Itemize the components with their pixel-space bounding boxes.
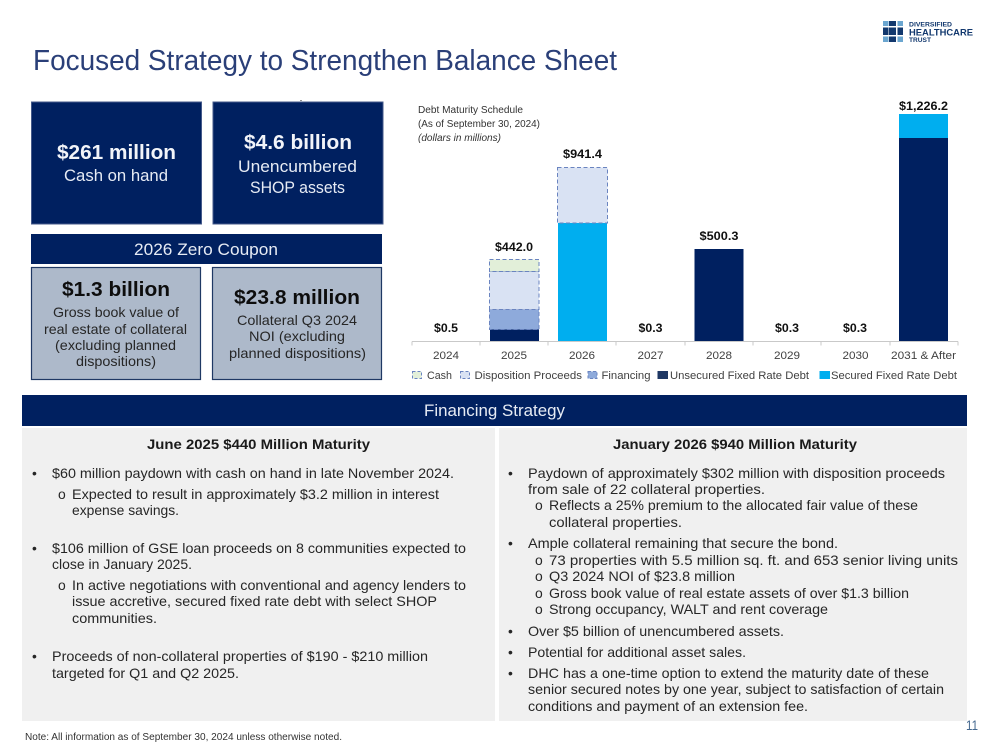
bullet list: • [508, 665, 513, 681]
legend: Cash [427, 370, 452, 382]
bullet list: o [58, 486, 66, 502]
panel: collateral NOI: Collateral Q3 2024 [237, 313, 357, 328]
bullet list [32, 465, 466, 681]
bullet list: expense savings. [72, 502, 179, 518]
bullet list: o [535, 601, 543, 617]
heading: Financing Strategy [22, 395, 967, 426]
panel: collateral NOI: $23.8 million [234, 286, 360, 309]
heading: Financing Strategy: Financing Strategy [424, 402, 566, 420]
bullet list: o [535, 585, 543, 601]
year labels [433, 350, 956, 362]
chart heading: (dollars in millions) [418, 133, 501, 144]
panel: unencumbered SHOP assets [213, 102, 383, 224]
bullet list: 73 properties with 5.5 million sq. ft. and 653 senior living units [549, 552, 958, 568]
year labels: 2029 [774, 350, 800, 362]
panel: unencumbered SHOP assets: Unencumbered [238, 158, 357, 176]
year labels: 2031 & After [891, 350, 956, 362]
value labels: $442.0 [495, 241, 533, 254]
bullet list: $60 million paydown with cash on hand in late November 2024. [52, 465, 454, 481]
page number: 11 [966, 718, 978, 733]
logo: Diversified Healthcare Trust: HEALTHCARE [909, 28, 973, 38]
panel: collateral NOI: planned dispositions) [229, 346, 366, 361]
bullet list: • [508, 535, 513, 551]
bullet list: o [535, 497, 543, 513]
column heading: June 2025 $440 Million Maturity [147, 437, 370, 452]
panel: June 2025 maturity [22, 428, 495, 721]
bullet list: senior secured notes by one year, subject to satisfaction of certain [528, 681, 944, 697]
panel: gross book value [32, 268, 200, 380]
legend: Unsecured Fixed Rate Debt [670, 370, 810, 382]
bullet list: $106 million of GSE loan proceeds on 8 communities expected to [52, 540, 466, 556]
value labels: $941.4 [563, 148, 603, 161]
panel: collateral NOI [212, 268, 382, 380]
panel: gross book value: real estate of collateral [44, 322, 187, 337]
value labels: $500.3 [700, 230, 739, 243]
value labels [434, 100, 948, 335]
bullet list: from sale of 22 collateral properties. [528, 481, 765, 497]
bullet list: • [508, 644, 513, 660]
year labels: 2024 [433, 350, 459, 362]
logo: Diversified Healthcare Trust: DIVERSIFIED [909, 22, 952, 28]
value labels: $0.5 [434, 322, 459, 335]
panel: collateral NOI: NOI (excluding [249, 329, 345, 344]
value labels: $0.3 [638, 322, 663, 335]
bullet list: targeted for Q1 and Q2 2025. [52, 665, 239, 681]
panel: cash on hand [32, 102, 202, 224]
bullet list: Gross book value of real estate assets of over $1.3 billion [549, 585, 909, 601]
year labels: 2030 [842, 350, 868, 362]
bullet list: In active negotiations with conventional and agency lenders to [72, 577, 466, 593]
panel: January 2026 maturity [499, 428, 967, 721]
value labels: $0.3 [775, 322, 800, 335]
legend: Financing [602, 370, 650, 382]
heading: 2026 Zero Coupon [31, 234, 382, 264]
chart heading: Debt Maturity Schedule [418, 105, 523, 116]
bar 2025 [490, 260, 539, 342]
bullet list: o [535, 552, 543, 568]
legend: Secured Fixed Rate Debt [831, 370, 958, 382]
logo: Diversified Healthcare Trust: TRUST [909, 37, 931, 44]
bullet list: • [32, 540, 37, 556]
chart heading [418, 105, 540, 144]
legend: Disposition Proceeds [474, 370, 582, 382]
bullet list: Proceeds of non-collateral properties of $190 - $210 million [52, 648, 428, 664]
bullet list: • [508, 465, 513, 481]
panel: gross book value: dispositions) [76, 354, 156, 369]
bullet list: issue accretive, secured fixed rate debt with select SHOP [72, 593, 437, 609]
panel: gross book value: (excluding planned [55, 338, 176, 353]
heading: 2026 Zero Coupon: 2026 Zero Coupon [134, 241, 278, 259]
bullet list: Expected to result in approximately $3.2 million in interest [72, 486, 439, 502]
bar 2026 [558, 168, 608, 342]
bullet list: communities. [72, 610, 157, 626]
panel: unencumbered SHOP assets: SHOP assets [250, 179, 345, 197]
bullet list: o [58, 577, 66, 593]
column heading: January 2026 $940 Million Maturity [613, 437, 857, 452]
bullet list: • [508, 623, 513, 639]
panel: cash on hand: $261 million [57, 141, 176, 164]
bullet list: Ample collateral remaining that secure the bond. [528, 535, 838, 551]
bullet list: close in January 2025. [52, 556, 192, 572]
panel: gross book value: Gross book value of [53, 305, 179, 320]
year labels: 2025 [501, 350, 527, 362]
panel: gross book value: $1.3 billion [62, 278, 170, 301]
chart: debt maturity schedule [412, 100, 958, 382]
bullet list: Paydown of approximately $302 million with disposition proceeds [528, 465, 945, 481]
panel: unencumbered SHOP assets: $4.6 billion [244, 131, 352, 154]
bullet list [508, 465, 958, 714]
bullet list: Strong occupancy, WALT and rent coverage [549, 601, 828, 617]
bullet list: Over $5 billion of unencumbered assets. [528, 623, 784, 639]
value labels: $1,226.2 [899, 100, 948, 113]
bullet list: • [32, 648, 37, 664]
chart heading: (As of September 30, 2024) [418, 119, 540, 130]
x axis [412, 342, 958, 346]
bullet list: Q3 2024 NOI of $23.8 million [549, 568, 735, 584]
year labels: 2028 [706, 350, 732, 362]
bullet list: • [32, 465, 37, 481]
value labels: $0.3 [843, 322, 868, 335]
bullet list: DHC has a one-time option to extend the maturity date of these [528, 665, 929, 681]
panel: cash on hand: Cash on hand [64, 167, 168, 185]
bullet list: Reflects a 25% premium to the allocated fair value of these [549, 497, 918, 513]
bullet list: conditions and payment of an extension fee. [528, 698, 808, 714]
bullet list: o [535, 568, 543, 584]
logo: Diversified Healthcare Trust [883, 21, 973, 44]
bar 2028 [694, 249, 744, 342]
bar 2031 and after [899, 114, 948, 342]
bullet list: collateral properties. [549, 514, 682, 530]
title: Focused Strategy to Strengthen Balance Sheet [33, 45, 617, 77]
year labels: 2027 [638, 350, 664, 362]
small stray mark [300, 100, 302, 101]
footnote: Note: All information as of September 30, 2024 unless otherwise noted. [25, 732, 342, 743]
bullet list: Potential for additional asset sales. [528, 644, 746, 660]
legend [412, 370, 958, 382]
year labels: 2026 [569, 350, 595, 362]
